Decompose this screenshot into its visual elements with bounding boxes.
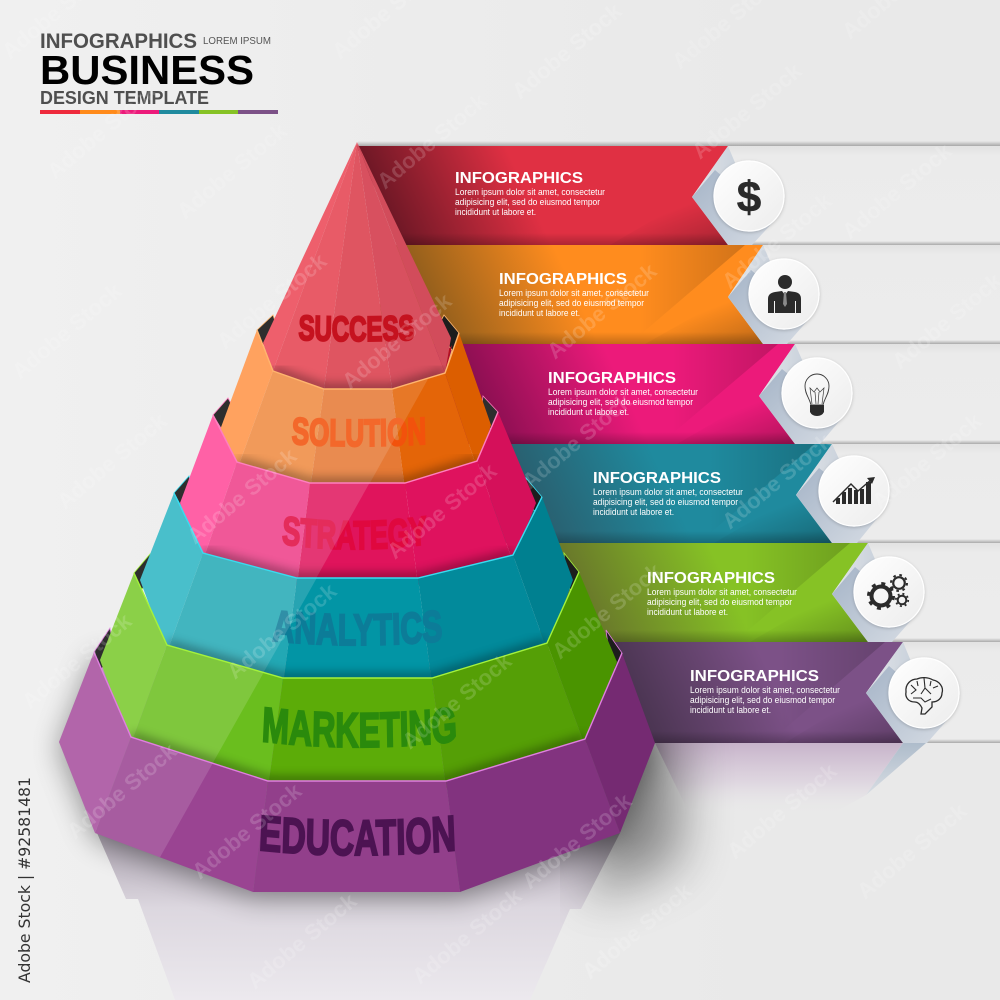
title: BUSINESS: BUSINESS bbox=[40, 47, 254, 93]
watermarks: Adobe Stock bbox=[517, 788, 637, 894]
watermarks: Adobe Stock bbox=[172, 118, 292, 224]
tier: STRATEGY magenta bbox=[180, 412, 536, 585]
ribbon: green: adipisicing elit, sed do eiusmod tempor bbox=[647, 597, 792, 607]
right lanes behind the ribbons bbox=[360, 146, 1000, 743]
icon disc: dollar bbox=[692, 146, 784, 245]
watermarks: Adobe Stock bbox=[187, 778, 307, 884]
watermarks: Adobe Stock bbox=[242, 888, 362, 994]
tier: MARKETING green: MARKETING bbox=[262, 706, 456, 748]
tier: STRATEGY magenta: STRATEGY bbox=[282, 516, 426, 550]
ribbon: magenta: Lorem ipsum dolor sit amet, consectetur bbox=[548, 387, 698, 397]
watermarks: Adobe Stock bbox=[852, 798, 972, 904]
ribbon: green: incididunt ut labore et. bbox=[647, 607, 728, 617]
tier: ANALYTICS teal bbox=[140, 492, 573, 685]
watermarks: Adobe Stock bbox=[382, 458, 502, 564]
watermarks: Adobe Stock bbox=[7, 278, 127, 384]
title: INFOGRAPHICS: INFOGRAPHICS bbox=[40, 30, 197, 53]
ribbon: teal: incididunt ut labore et. bbox=[593, 507, 674, 517]
watermarks: Adobe Stock bbox=[542, 258, 662, 364]
ribbon: orange: adipisicing elit, sed do eiusmod tempor bbox=[499, 298, 644, 308]
icon disc: light bulb bbox=[759, 344, 852, 444]
watermarks: Adobe Stock bbox=[867, 408, 987, 514]
ribbon: purple: adipisicing elit, sed do eiusmod tempor bbox=[690, 695, 835, 705]
ribbon: orange: INFOGRAPHICS bbox=[499, 271, 627, 288]
icon disc: gears bbox=[832, 543, 924, 642]
tier: ANALYTICS teal: ANALYTICS bbox=[272, 610, 442, 646]
watermarks: Adobe Stock bbox=[52, 408, 172, 514]
tier: EDUCATION purple: EDUCATION bbox=[260, 814, 455, 856]
lane separator shadows bbox=[358, 141, 1000, 743]
ribbon: green bbox=[540, 543, 868, 642]
watermarks: Adobe Stock bbox=[547, 558, 667, 664]
tier: SUCCESS cone bbox=[263, 142, 451, 388]
watermarks: Adobe Stock bbox=[577, 878, 697, 984]
ribbon: purple bbox=[590, 642, 903, 743]
ribbon: red bbox=[356, 146, 728, 245]
watermarks: Adobe Stock bbox=[837, 138, 957, 244]
ribbon: teal: Lorem ipsum dolor sit amet, consectetur bbox=[593, 487, 743, 497]
ribbon: magenta: adipisicing elit, sed do eiusmod tempor bbox=[548, 397, 693, 407]
subtitle: LOREM IPSUM: LOREM IPSUM bbox=[203, 35, 271, 47]
ribbon: purple: INFOGRAPHICS bbox=[690, 668, 819, 685]
ribbon: teal bbox=[490, 444, 832, 543]
ribbon: teal: INFOGRAPHICS bbox=[593, 470, 721, 487]
watermarks: Adobe Stock bbox=[337, 288, 457, 394]
watermarks: Adobe Stock bbox=[62, 738, 182, 844]
watermarks: Adobe Stock bbox=[517, 388, 637, 494]
watermarks: Adobe Stock bbox=[397, 648, 517, 754]
watermarks: Adobe Stock bbox=[372, 88, 492, 194]
ribbon: orange bbox=[380, 245, 763, 344]
watermarks: Adobe Stock bbox=[182, 443, 302, 549]
tier: EDUCATION purple bbox=[59, 652, 655, 892]
ribbon: red: INFOGRAPHICS bbox=[455, 170, 583, 187]
ribbon: purple: incididunt ut labore et. bbox=[690, 705, 771, 715]
ribbon: orange: incididunt ut labore et. bbox=[499, 308, 580, 318]
ribbon: green: Lorem ipsum dolor sit amet, consectetur bbox=[647, 587, 797, 597]
icon disc: dollar: $ bbox=[737, 173, 761, 222]
watermarks: Adobe Stock bbox=[717, 188, 837, 294]
ribbon: magenta: incididunt ut labore et. bbox=[548, 407, 629, 417]
tier: SOLUTION orange: SOLUTION bbox=[292, 416, 426, 448]
watermarks: Adobe Stock bbox=[717, 428, 837, 534]
ribbon: red: adipisicing elit, sed do eiusmod tempor bbox=[455, 197, 600, 207]
ribbon: red: incididunt ut labore et. bbox=[455, 207, 536, 217]
ribbon: green: INFOGRAPHICS bbox=[647, 570, 775, 587]
back rim shadow gaps bbox=[94, 315, 622, 675]
watermarks: Adobe Stock bbox=[722, 758, 842, 864]
ribbon: teal: adipisicing elit, sed do eiusmod tempor bbox=[593, 497, 738, 507]
title block bbox=[40, 30, 278, 114]
watermarks: Adobe Stock bbox=[42, 78, 162, 184]
tier: MARKETING green bbox=[100, 572, 617, 788]
ribbon: magenta bbox=[430, 344, 795, 444]
ribbon: purple: Lorem ipsum dolor sit amet, consectetur bbox=[690, 685, 840, 695]
stock id vertical text: Adobe Stock | #92581481 bbox=[15, 777, 34, 983]
watermarks: Adobe Stock bbox=[17, 608, 137, 714]
watermarks: Adobe Stock bbox=[407, 883, 527, 989]
ribbon: red: Lorem ipsum dolor sit amet, consectetur bbox=[455, 187, 605, 197]
pyramid: layered cone bbox=[59, 142, 655, 892]
watermarks: Adobe Stock bbox=[222, 578, 342, 684]
watermarks: Adobe Stock bbox=[507, 0, 627, 104]
watermarks: Adobe Stock bbox=[687, 58, 807, 164]
tier: SOLUTION orange bbox=[220, 330, 491, 490]
pyramid floor reflection bbox=[59, 658, 926, 1000]
tier: SUCCESS cone: SUCCESS bbox=[298, 314, 414, 342]
colour strip bbox=[40, 110, 278, 114]
ribbon: orange: Lorem ipsum dolor sit amet, consectetur bbox=[499, 288, 649, 298]
icon disc: growth chart bbox=[796, 444, 889, 543]
ribbon: magenta: INFOGRAPHICS bbox=[548, 370, 676, 387]
watermarks: Adobe Stock bbox=[212, 248, 332, 354]
icon disc: businessman bbox=[728, 245, 819, 344]
title: DESIGN TEMPLATE: DESIGN TEMPLATE bbox=[40, 87, 209, 108]
icon disc: brain bbox=[866, 642, 959, 743]
